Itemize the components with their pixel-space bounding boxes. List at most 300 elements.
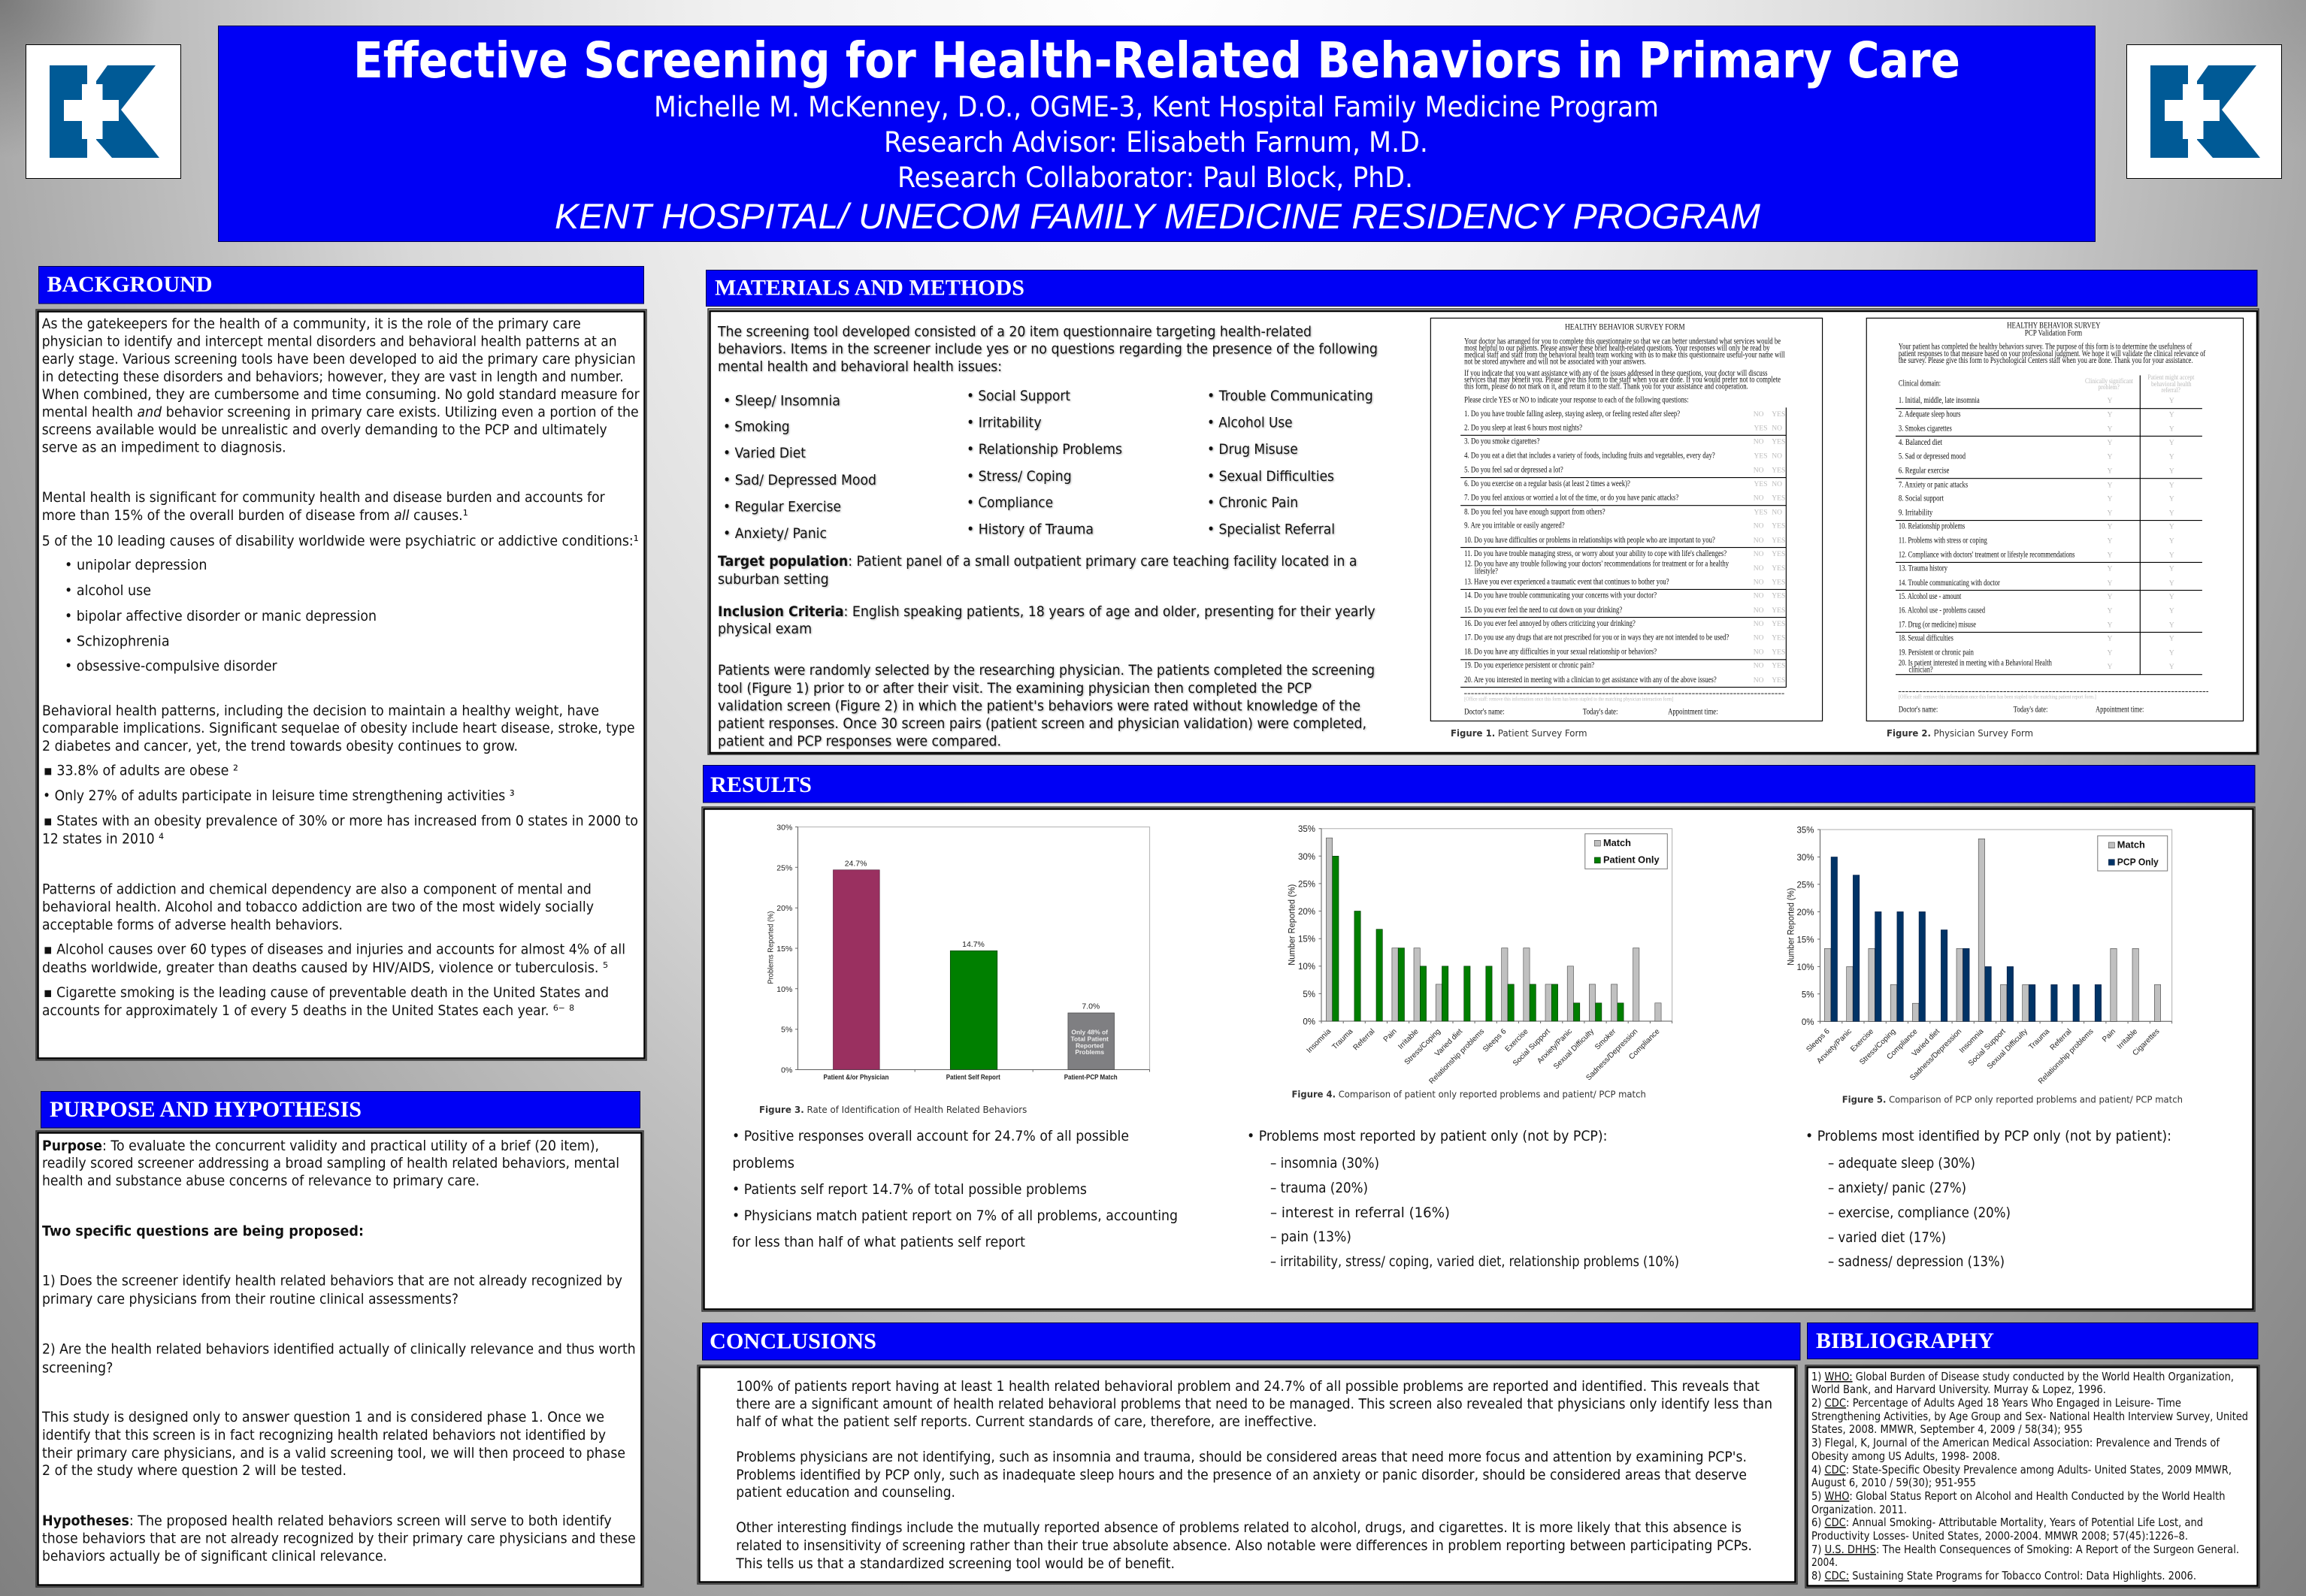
figure 2: physician survey form: Y: [2169, 453, 2174, 461]
figure 2: physician survey form: Y: [2108, 397, 2113, 405]
references list: 4) CDC: State-Specific Obesity Prevalence among Adults- United States, 2009 MMWR,: [1811, 1463, 2232, 1477]
figure 2: physician survey form: 18. Sexual difficulties: [1899, 634, 1953, 643]
text: patient only problems: – trauma (20%): [1270, 1180, 1368, 1196]
figure 1: patient survey form: 18. Do you have any difficulties in your sexual relationship or behaviors?: [1464, 648, 1657, 657]
text: study phases: their primary care physicians, and is a valid screening tool, we will then proceed to phase: [42, 1446, 625, 1461]
x axis labels: Insomnia: [1306, 1027, 1333, 1055]
figure 1: patient survey form: 20. Are you interested in meeting with a clinician to get assistance with any of the above issues?: [1464, 676, 1717, 685]
chart: figure 3 rate of identification: Problems Reported (%): [767, 911, 776, 984]
figure 1: patient survey form: YES: [1772, 592, 1785, 600]
figure 2: physician survey form: Y: [2108, 579, 2113, 588]
figure 1: patient survey form: 6. Do you exercise on a regular basis (at least 2 times a week)?: [1464, 479, 1630, 488]
figure 2: physician survey form: Y: [2169, 621, 2174, 630]
text: overall results bullets: • Patients self report 14.7% of total possible problems: [732, 1182, 1087, 1198]
figure 1: patient survey form: 16. Do you ever feel annoyed by others criticizing your drinking?: [1464, 619, 1636, 628]
list: obesity facts: ▪ 33.8% of adults are obese ²: [44, 763, 238, 779]
x axis labels: Varied diet: [1911, 1027, 1941, 1058]
text: hypotheses: Hypotheses: The proposed health related behaviors screen will serve to both identify: [42, 1513, 612, 1529]
list: issues column 1: • Anxiety/ Panic: [723, 526, 827, 542]
figure 2: physician survey form: Y: [2108, 607, 2113, 615]
panel: materials and methods: [707, 271, 2259, 754]
x axis labels: Anxiety/Panic: [1815, 1027, 1854, 1066]
figure 1: patient survey form: Your doctor has arranged for you to complete this questionnaire so that we can better understand what services would be: [1464, 337, 1781, 346]
figure 2: physician survey form: 11. Problems with stress or coping: [1899, 537, 1987, 546]
x axis labels: Pain: [1382, 1027, 1399, 1044]
figure 1: patient survey form: NO: [1754, 620, 1764, 628]
text: background intro: in detecting these disorders and behaviors; however, they are vast in length and number.: [42, 370, 624, 385]
text: target population: Target population: Patient panel of a small outpatient primary care teaching facility located in a: [718, 554, 1357, 570]
figure 2: physician survey form: Y: [2108, 537, 2113, 546]
chart: figure 5 PCP only vs match: [1787, 827, 2172, 1086]
x axis labels: Relationship problems: [2037, 1027, 2096, 1086]
references list: Organization. 2011.: [1811, 1503, 1907, 1516]
x axis labels: Sleeps 6: [1805, 1027, 1832, 1054]
figure 2: physician survey form: Y: [2169, 523, 2174, 530]
text: mental health burden: 5 of the 10 leading causes of disability worldwide were psychiatric or addictive conditions:¹: [42, 534, 639, 549]
figure 1: patient survey form: NO: [1772, 425, 1782, 433]
list: issues column 1: • Smoking: [723, 419, 790, 435]
text: overall results bullets: for less than half of what patients self report: [732, 1235, 1025, 1250]
text: background intro: [42, 316, 640, 455]
bars: PCP only series: [1831, 857, 2102, 1021]
list: issues column 3: • Sexual Difficulties: [1207, 469, 1334, 485]
heading: conclusions: CONCLUSIONS: [710, 1328, 876, 1353]
figure 1: patient survey form: 12. Do you have any trouble following your doctors' recommendations for treatment or for a healthy: [1464, 560, 1730, 569]
figure 2: physician survey form: 16. Alcohol use - problems caused: [1899, 606, 1985, 615]
legend: [2098, 836, 2168, 871]
figure 2: physician survey form: Y: [2108, 593, 2113, 601]
figure 1: patient survey form: NO: [1754, 466, 1764, 474]
list: alcohol and smoking facts: [42, 942, 625, 1019]
caption: figure 4: Figure 4. Comparison of patient only reported problems and patient/ PCP match: [1291, 1089, 1646, 1100]
figure 1: patient survey form: not be stored anywhere and will not be associated with your answers.: [1464, 358, 1646, 367]
figure 2: physician survey form: Clinically significant: [2085, 377, 2133, 385]
text: study phases: [41, 1410, 625, 1479]
text: question 1: 1) Does the screener identify health related behaviors that are not already recognized by: [42, 1273, 622, 1289]
x axis labels: Exercise: [1849, 1027, 1875, 1053]
figure 1: patient survey form: NO: [1772, 452, 1782, 461]
figure 2: physician survey form: 10. Relationship problems: [1899, 522, 1965, 530]
bars: match series: [1326, 838, 1661, 1021]
x axis labels: Pain: [2101, 1027, 2117, 1044]
figure 2: physician survey form: 19. Persistent or chronic pain: [1899, 648, 1974, 657]
x axis labels: Irritable: [2116, 1027, 2140, 1051]
text: PCP only problems: – varied diet (17%): [1828, 1230, 1946, 1246]
figure 1: patient survey form: 7. Do you feel anxious or worried a lot of the time, or do you have panic attacks?: [1464, 494, 1678, 503]
figure 2: physician survey form: [1866, 318, 2244, 721]
figure 2: physician survey form: 7. Anxiety or panic attacks: [1899, 480, 1968, 489]
text: hypotheses: behaviors actually be of significant clinical relevance.: [42, 1549, 387, 1564]
text: addiction patterns: acceptable forms of adverse health behaviors.: [42, 917, 343, 933]
figure 2: physician survey form: [Office staff: remove this information once this form has been stapled to the matching patient report form.]: [1899, 694, 2096, 700]
figure 1: patient survey form: NO: [1754, 634, 1764, 642]
figure 1: patient survey form: YES: [1754, 509, 1768, 517]
heading: materials and methods: MATERIALS AND METHODS: [715, 276, 1024, 301]
references list: Obesity among US Adults, 1998- 2008.: [1811, 1449, 2000, 1463]
figure 1: patient survey form: NO: [1754, 438, 1764, 446]
list: issues column 3: • Chronic Pain: [1207, 495, 1298, 511]
references list: Productivity Losses- United States, 2000-2004. MMWR 2008; 57(45):1226–8.: [1811, 1529, 2188, 1543]
list: issues column 1: • Sad/ Depressed Mood: [723, 473, 876, 488]
figure 1: patient survey form: YES: [1754, 480, 1768, 488]
chart: figure 4 patient only vs match: 35%: [1298, 825, 1315, 834]
text: mental health burden: more than 15% of the overall burden of disease from all causes.¹: [42, 508, 468, 524]
text: patient only problems: – interest in referral (16%): [1270, 1205, 1450, 1221]
x axis labels: Smoker: [1593, 1027, 1618, 1051]
text: procedure: patient responses. Once 30 screen pairs (patient screen and physician validation) were completed,: [718, 716, 1366, 732]
text: mental health burden: [42, 490, 639, 549]
chart: figure 4 patient only vs match: 20%: [1298, 908, 1315, 917]
text: purpose: health and substance abuse concerns of relevance to primary care.: [42, 1174, 480, 1189]
heading: results: RESULTS: [710, 772, 812, 797]
chart: figure 4 patient only vs match: Number Reported (%): [1288, 884, 1297, 966]
chart: figure 5 PCP only vs match: 10%: [1796, 963, 1814, 972]
figure 2: physician survey form: problem?: [2098, 383, 2120, 391]
figure 2: physician survey form: 6. Regular exercise: [1899, 467, 1949, 476]
text: behavioral health patterns: Behavioral health patterns, including the decision to maintain a healthy weight, have: [42, 703, 599, 719]
text: study phases: 2 of the study where question 2 will be tested.: [42, 1463, 347, 1479]
text: purpose: [42, 1138, 619, 1189]
chart: figure 5 PCP only vs match: 35%: [1796, 827, 1814, 836]
figure 1: patient survey form: NO: [1754, 564, 1764, 573]
figure 2: physician survey form: 3. Smokes cigarettes: [1899, 425, 1952, 434]
heading: background: BACKGROUND: [47, 272, 212, 297]
chart: figure 4 patient only vs match: 30%: [1298, 853, 1315, 862]
figure 1: patient survey form: 14. Do you have trouble communicating your concerns with your doctor?: [1464, 591, 1657, 600]
list: leading causes: • alcohol use: [65, 583, 151, 599]
text: procedure: tool (Figure 1) prior to or after their visit. The examining physician then completed the PCP: [718, 681, 1312, 697]
figure 2: physician survey form: Y: [2108, 453, 2113, 461]
text: target population: [718, 554, 1357, 588]
text: inclusion criteria: [718, 604, 1375, 637]
text: hypotheses: [42, 1513, 636, 1564]
figure 2: physician survey form: Y: [2169, 411, 2174, 419]
references list: 2004.: [1811, 1555, 1838, 1569]
chart: figure 3 rate of identification: 20%: [776, 904, 792, 913]
figure 2: physician survey form: Y: [2169, 607, 2174, 615]
chart: figure 3 rate of identification: Patient Self Report: [946, 1074, 1000, 1082]
text: behavioral health patterns: comparable implications. Significant sequelae of obesity include heart disease, stroke, type: [42, 721, 635, 736]
list: obesity facts: [42, 763, 638, 848]
heading: purpose and hypothesis: PURPOSE AND HYPOTHESIS: [50, 1097, 362, 1122]
chart: figure 3 rate of identification: [767, 824, 1150, 1082]
figure 2: physician survey form: Y: [2108, 439, 2113, 447]
caption: figure 5: Figure 5. Comparison of PCP only reported problems and patient/ PCP match: [1842, 1094, 2183, 1105]
list: leading causes: • bipolar affective disorder or manic depression: [65, 609, 377, 624]
chart: figure 4 patient only vs match: 10%: [1298, 963, 1315, 972]
x axis labels: Relationship problems: [1427, 1027, 1486, 1086]
x axis labels: Insomnia: [1958, 1027, 1986, 1055]
x axis labels: Anxiety/Panic: [1536, 1027, 1574, 1066]
program name: KENT HOSPITAL/ UNECOM FAMILY MEDICINE RESIDENCY PROGRAM: [555, 196, 1761, 236]
text: screening tool intro: behaviors. Items in the screener include yes or no questions regarding the presence of the following: [718, 342, 1378, 358]
text: screening tool intro: mental health and behavioral health issues:: [718, 359, 1002, 375]
text: question 2: screening?: [42, 1360, 113, 1376]
references list: August 6, 2010 / 59(30); 951-955: [1811, 1476, 1976, 1489]
list: alcohol and smoking facts: accounts for approximately 1 of every 5 deaths in the United States each year. ⁶⁻ ⁸: [42, 1003, 574, 1019]
figure 2: physician survey form: Y: [2108, 481, 2113, 489]
figure 2: physician survey form: Y: [2108, 523, 2113, 530]
chart: figure 5 PCP only vs match: Number Reported (%): [1787, 888, 1796, 966]
references list: 5) WHO: Global Status Report on Alcohol and Health Conducted by the World Health: [1811, 1489, 2225, 1503]
x axis labels: Varied diet: [1433, 1027, 1464, 1058]
text: addiction patterns: Patterns of addiction and chemical dependency are also a component of mental and: [42, 882, 592, 898]
references list: 3) Flegal, K, Journal of the American Medical Association: Prevalence and Trends of: [1811, 1436, 2220, 1449]
text: procedure: patient and PCP responses were compared.: [718, 733, 1001, 750]
chart: figure 4 patient only vs match: 15%: [1298, 936, 1315, 945]
list: obesity facts: 12 states in 2010 ⁴: [42, 832, 164, 848]
text: target population: suburban setting: [718, 572, 829, 588]
figure 1: patient survey form: [1430, 318, 1823, 721]
bars: patient only series: [1333, 856, 1624, 1021]
figure 2: physician survey form: Doctor's name:: [1899, 706, 1938, 715]
list: alcohol and smoking facts: ▪ Alcohol causes over 60 types of diseases and injuries and accounts for almost 4% of all: [44, 942, 625, 958]
bar: patient-PCP match 7.0%: Problems: [1075, 1048, 1104, 1056]
chart: figure 4 patient only vs match: 25%: [1298, 880, 1315, 889]
figure 1: patient survey form: NO: [1754, 494, 1764, 503]
list: issues column 2: • Stress/ Coping: [967, 469, 1072, 485]
text: addiction patterns: behavioral health. Alcohol and tobacco addiction are two of the most widely socially: [42, 899, 594, 915]
list: leading causes: • obsessive-compulsive disorder: [65, 659, 277, 675]
text: PCP only problems: – adequate sleep (30%): [1828, 1156, 1975, 1171]
figure 1: patient survey form: NO: [1754, 662, 1764, 670]
chart: figure 3 rate of identification: 10%: [776, 985, 792, 994]
text: background intro: screens available would be unrealistic and overly demanding to the PCP and ultimately: [42, 422, 607, 438]
text: addiction patterns: [42, 882, 594, 933]
x axis labels: Referral: [2049, 1027, 2074, 1052]
references list: World Bank, and Harvard University. Murray & Lopez, 1996.: [1811, 1383, 2106, 1396]
figure 2: physician survey form: Y: [2108, 509, 2113, 517]
list: issues column 2: • Irritability: [967, 416, 1042, 431]
text: patient only problems: – pain (13%): [1270, 1229, 1351, 1245]
bar: patient-PCP match 7.0%: Reported: [1076, 1041, 1103, 1049]
list: issues column 2: • Compliance: [967, 495, 1053, 511]
text: procedure: [718, 663, 1375, 750]
figure 1: patient survey form: 19. Do you experience persistent or chronic pain?: [1464, 661, 1594, 670]
figure 2: physician survey form: Y: [2169, 467, 2174, 476]
subheading: two questions: Two specific questions are being proposed:: [42, 1223, 364, 1240]
text: conclusion 1: half of what the patient self reports. Current standards of care, therefore, are ineffective.: [736, 1414, 1317, 1430]
bar: patient self report 14.7%: 14.7%: [962, 940, 985, 949]
chart: figure 3 rate of identification: 25%: [776, 863, 792, 872]
list: issues column 1: [723, 393, 876, 542]
text: procedure: Patients were randomly selected by the researching physician. The patients completed the screening: [718, 663, 1375, 679]
chart: figure 5 PCP only vs match: 25%: [1796, 881, 1814, 890]
figure 2: physician survey form: Y: [2108, 663, 2113, 671]
text: background intro: early stage. Various screening tools have been developed to aid the primary care physician: [42, 352, 636, 367]
x axis labels: Sadness/Depression: [1584, 1027, 1639, 1082]
figure 1: patient survey form: NO: [1754, 410, 1764, 419]
figure 1: patient survey form: YES: [1772, 438, 1785, 446]
figure 2: physician survey form: 20. Is patient interested in meeting with a Behavioral Health: [1899, 659, 2052, 668]
figure 1: patient survey form: NO: [1754, 648, 1764, 657]
x axis labels: Sexual Difficulty: [1986, 1027, 2029, 1071]
figure 1: patient survey form: YES: [1754, 452, 1768, 461]
figure 1: patient survey form: YES: [1772, 578, 1785, 586]
figure 2: physician survey form: Patient might accept: [2147, 373, 2195, 382]
list: issues column 2: • History of Trauma: [967, 522, 1094, 538]
text: overall results bullets: [732, 1129, 1178, 1250]
figure 1: patient survey form: YES: [1772, 606, 1785, 615]
text: procedure: validation screen (Figure 2) in which the patient's behaviors were rated without knowledge of the: [718, 699, 1360, 714]
legend: Patient Only: [1603, 855, 1660, 866]
text: conclusion 2: patient education and counseling.: [736, 1485, 955, 1501]
x axis labels: Cigarettes: [2132, 1027, 2162, 1057]
text: behavioral health patterns: [42, 703, 635, 754]
chart: figure 4 patient only vs match: [1288, 825, 1672, 1086]
figure 2: physician survey form: HEALTHY BEHAVIOR SURVEY: [2007, 322, 2101, 331]
figure 1: patient survey form: YES: [1772, 550, 1785, 558]
text: PCP only problems: – sadness/ depression (13%): [1828, 1254, 2005, 1270]
list: issues column 3: • Alcohol Use: [1207, 416, 1293, 431]
figure 1: patient survey form: NO: [1754, 592, 1764, 600]
text: question 1: primary care physicians from their routine clinical assessments?: [42, 1292, 458, 1307]
figure 2: physician survey form: Today's date:: [2014, 706, 2047, 715]
figure 1: patient survey form: YES: [1772, 676, 1785, 685]
bar: patient-PCP match 7.0%: Only 48% of: [1071, 1029, 1108, 1036]
list: obesity facts: • Only 27% of adults participate in leisure time strengthening activities ³: [43, 788, 515, 804]
chart: figure 4 patient only vs match: 0%: [1303, 1017, 1315, 1026]
text: patient only problems: – insomnia (30%): [1270, 1156, 1379, 1171]
figure 1: patient survey form: YES: [1772, 522, 1785, 530]
figure 2: physician survey form: Y: [2169, 579, 2174, 588]
text: conclusion 2: [736, 1449, 1747, 1501]
references list: 8) CDC: Sustaining State Programs for Tobacco Control: Data Highlights. 2006.: [1811, 1569, 2196, 1582]
figure 2: physician survey form: Y: [2169, 439, 2174, 447]
references list: States, 2008. MMWR, September 4, 2009 / 58(34); 955: [1811, 1422, 2083, 1436]
caption: figure 3: Figure 3. Rate of Identification of Health Related Behaviors: [759, 1104, 1027, 1115]
figure 2: physician survey form: Y: [2169, 495, 2174, 503]
list: issues column 3: • Specialist Referral: [1207, 522, 1335, 538]
bar: patient self report 14.7%: [950, 940, 997, 1069]
text: study phases: This study is designed only to answer question 1 and is considered phase 1. Once we: [41, 1410, 604, 1425]
figure 2: physician survey form: Y: [2108, 635, 2113, 643]
author: Michelle M. McKenney, D.O., OGME-3, Kent Hospital Family Medicine Program: [654, 91, 1659, 123]
text: background intro: As the gatekeepers for the health of a community, it is the role of the primary care: [42, 316, 581, 332]
list: leading causes: • Schizophrenia: [65, 633, 170, 649]
chart: figure 5 PCP only vs match: 30%: [1796, 854, 1814, 863]
x axis labels: Compliance: [1627, 1027, 1662, 1061]
figure 1: patient survey form: Please circle YES or NO to indicate your response to each of the following questions:: [1464, 395, 1689, 404]
x axis labels: Trauma: [2027, 1027, 2052, 1051]
figure 1: patient survey form: 4. Do you eat a diet that includes a variety of foods, including fruits and vegetables, every day?: [1464, 452, 1715, 461]
figure 1: patient survey form: medical staff and staff from the behavioral health team working with us to make this questionnaire useful-your name will: [1464, 350, 1785, 359]
text: PCP only problems: – exercise, compliance (20%): [1828, 1205, 2011, 1221]
figure 2: physician survey form: PCP Validation Form: [2025, 329, 2082, 338]
x axis labels: Stress/Coping: [1403, 1027, 1442, 1067]
figure 1: patient survey form: YES: [1772, 662, 1785, 670]
panel: bibliography: [1805, 1322, 2259, 1588]
figure 1: patient survey form: Appointment time:: [1668, 707, 1718, 716]
figure 2: physician survey form: Y: [2108, 565, 2113, 573]
references list: 1) WHO: Global Burden of Disease study conducted by the World Health Organization,: [1811, 1370, 2234, 1383]
figure 1: patient survey form: services that may benefit you. Please give this form to the staff when you are done. If you would prefer not to complete: [1464, 376, 1781, 385]
text: patient only problems: • Problems most reported by patient only (not by PCP):: [1247, 1129, 1607, 1144]
figure 2: physician survey form: Y: [2169, 593, 2174, 601]
figure 2: physician survey form: Y: [2108, 621, 2113, 630]
text: mental health burden: Mental health is significant for community health and disease burden and accounts for: [42, 490, 605, 506]
text: question 1: [42, 1273, 622, 1307]
figure 1: patient survey form: [Office staff: remove this information once this form has been stapled to the matching physician interaction form]: [1464, 697, 1673, 703]
text: background intro: mental health and behavior screening in primary care exists. Utilizing even a portion of the: [42, 404, 639, 421]
figure 2: physician survey form: referral?: [2162, 386, 2180, 394]
figure 1: patient survey form: 2. Do you sleep at least 6 hours most nights?: [1464, 424, 1582, 433]
research collaborator: Research Collaborator: Paul Block, PhD.: [897, 162, 1413, 194]
figure 1: patient survey form: HEALTHY BEHAVIOR SURVEY FORM: [1565, 323, 1685, 332]
legend: Match: [1603, 838, 1631, 848]
figure 2: physician survey form: Y: [2169, 551, 2174, 559]
figure 2: physician survey form: the survey. Please give this form to Psychological Centers staff when you are done. Thank you for your assistance.: [1899, 356, 2193, 365]
text: behavioral health patterns: 2 diabetes and cancer, yet, the trend towards obesity continues to grow.: [42, 739, 518, 754]
figure 2: physician survey form: 5. Sad or depressed mood: [1899, 452, 1966, 461]
logo: Kent Hospital left: [26, 45, 180, 179]
bars: match series: [1824, 839, 2161, 1021]
list: leading causes: [65, 558, 377, 675]
text: purpose: Purpose: To evaluate the concurrent validity and practical utility of a brief (20 item),: [42, 1138, 599, 1154]
text: question 2: [42, 1342, 636, 1376]
text: question 2: 2) Are the health related behaviors identified actually of clinically relevance and thus worth: [42, 1342, 636, 1358]
figure 2: physician survey form: Y: [2169, 425, 2174, 434]
chart: figure 3 rate of identification: 30%: [776, 824, 792, 833]
text: conclusion 3: [735, 1520, 1752, 1572]
figure 1: patient survey form: most helpful to our patients. Please answer these brief health-related questions. Your responses will only be read by: [1464, 344, 1770, 353]
figure 1: patient survey form: 13. Have you ever experienced a traumatic event that continues to bother you?: [1464, 577, 1669, 586]
list: leading causes: • unipolar depression: [65, 558, 207, 573]
list: issues column 2: • Relationship Problems: [967, 442, 1122, 458]
text: conclusion 3: Other interesting findings include the mutually reported absence of problems related to alcohol, drugs, and cigarettes. It is more likely that this absence is: [736, 1520, 1742, 1536]
text: screening tool intro: The screening tool developed consisted of a 20 item questionnaire targeting health-related: [717, 324, 1312, 340]
text: screening tool intro: [717, 324, 1378, 375]
text: study phases: identify that this screen is in fact recognizing health related behaviors not identified by: [42, 1428, 606, 1443]
figure 2: physician survey form: 1. Initial, middle, late insomnia: [1899, 396, 1980, 405]
figure 2: physician survey form: 8. Social support: [1899, 494, 1944, 503]
figure 1: patient survey form: Today's date:: [1583, 707, 1618, 716]
list: issues column 1: • Sleep/ Insomnia: [723, 393, 840, 409]
x axis labels: Sadness/Depression: [1908, 1027, 1963, 1082]
figure 1: patient survey form: If you indicate that you want assistance with any of the issues addressed in these questions, your doctor will discuss: [1464, 369, 1767, 378]
figure 2: physician survey form: Y: [2169, 663, 2174, 671]
figure 1: patient survey form: 1. Do you have trouble falling asleep, staying asleep, or feeling rested after sleep?: [1464, 410, 1680, 419]
chart: figure 3 rate of identification: 15%: [776, 945, 792, 954]
x axis labels: [1306, 1027, 1662, 1086]
chart: figure 4 patient only vs match: 5%: [1303, 990, 1315, 999]
figure 2: physician survey form: Y: [2108, 411, 2113, 419]
figure 2: physician survey form: 9. Irritability: [1899, 509, 1933, 517]
legend: Match: [2117, 840, 2145, 851]
title: Effective Screening for Health-Related Behaviors in Primary Care: [353, 32, 1960, 89]
x axis labels: Sleeps 6: [1481, 1027, 1509, 1054]
references list: 2) CDC: Percentage of Adults Aged 18 Years Who Engaged in Leisure- Time: [1811, 1396, 2181, 1410]
caption: figure 1: Figure 1. Patient Survey Form: [1451, 727, 1587, 739]
text: purpose: readily scored screener addressing a broad sampling of health related behaviors, mental: [42, 1156, 619, 1171]
x axis labels: Sexual Difficulty: [1552, 1027, 1596, 1071]
figure 1: patient survey form: YES: [1772, 620, 1785, 628]
x axis labels: Exercise: [1504, 1027, 1530, 1053]
text: conclusion 1: [736, 1379, 1772, 1430]
figure 2: physician survey form: 4. Balanced diet: [1899, 438, 1943, 447]
figure 1: patient survey form: YES: [1772, 410, 1785, 419]
figure 2: physician survey form: Y: [2169, 537, 2174, 546]
list: alcohol and smoking facts: ▪ Cigarette smoking is the leading cause of preventable death in the United States and: [44, 985, 609, 1001]
text: background intro: physician to identify and intercept mental disorders and behavioral health patterns at an: [42, 334, 617, 350]
research advisor: Research Advisor: Elisabeth Farnum, M.D.: [884, 126, 1428, 159]
text: PCP only problems: • Problems most identified by PCP only (not by patient):: [1805, 1129, 2171, 1144]
bar: patient and/or physician 24.7%: 24.7%: [845, 859, 867, 868]
figure 2: physician survey form: 14. Trouble communicating with doctor: [1899, 579, 2000, 588]
figure 2: physician survey form: 12. Compliance with doctors' treatment or lifestyle recommendations: [1899, 550, 2074, 559]
figure 1: patient survey form: NO: [1772, 480, 1782, 488]
panel: results: [702, 765, 2255, 1311]
